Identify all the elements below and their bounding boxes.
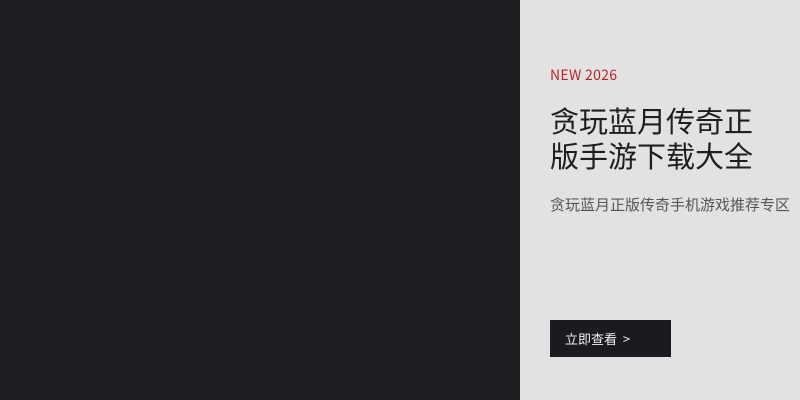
button: view now	[550, 320, 671, 357]
heading	[550, 99, 753, 176]
heading: 贪玩蓝月传奇正	[550, 99, 753, 141]
heading: 版手游下载大全	[550, 134, 753, 176]
panel: dark image area	[0, 0, 520, 400]
button label: 立即查看 >	[565, 329, 630, 348]
subtitle: 贪玩蓝月正版传奇手机游戏推荐专区	[550, 194, 790, 215]
label: NEW 2026: NEW 2026	[550, 65, 617, 85]
panel: light content area	[520, 0, 800, 400]
